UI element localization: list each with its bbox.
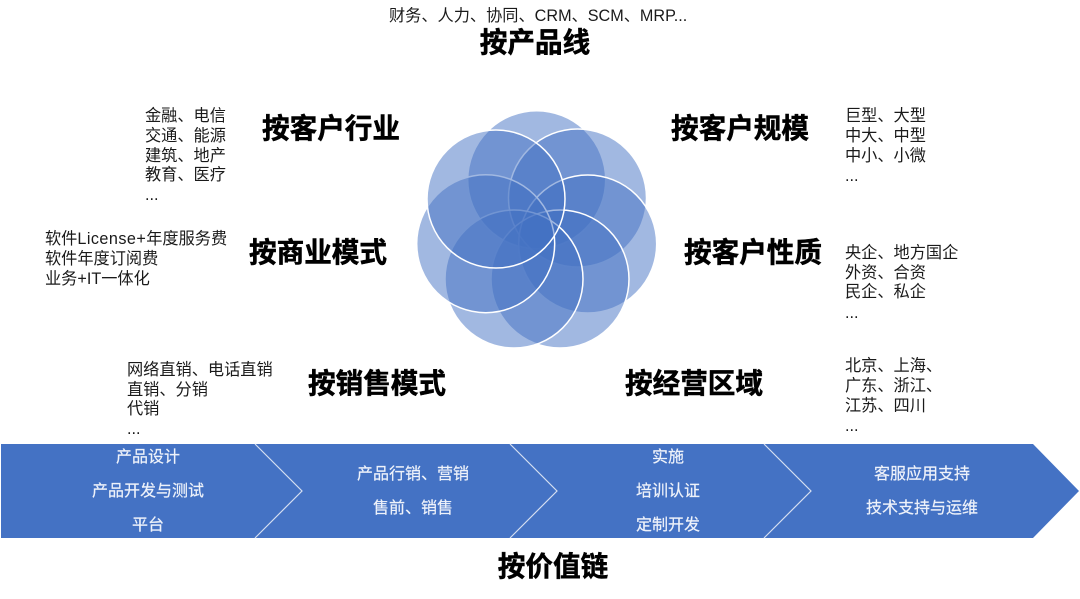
text block: sales stage: 售前、销售: [373, 499, 453, 517]
chart: value chain arrow band: [1, 444, 1079, 538]
text block: product line examples: 财务、人力、协同、CRM、SCM、MRP...: [389, 7, 687, 25]
text block: implementation stage: 实施: [652, 448, 684, 466]
circle: lower left: [445, 210, 583, 348]
circle: upper right: [508, 129, 646, 267]
circle: upper left: [427, 130, 565, 268]
text block: support stage: 技术支持与运维: [866, 499, 978, 517]
text block: implementation stage: 定制开发: [636, 516, 700, 534]
text block: sales models: 直销、分销: [127, 381, 208, 399]
text block: customer natures: 央企、地方国企: [845, 244, 958, 262]
heading: by customer nature: 按客户性质: [684, 237, 822, 268]
text block: customer natures: 外资、合资: [845, 264, 926, 282]
text block: sales models: [127, 360, 273, 438]
text block: industries: [145, 107, 226, 204]
text block: industries: ...: [145, 186, 158, 204]
text block: customer sizes: 中大、中型: [845, 127, 926, 145]
heading: by operating region: 按经营区域: [625, 368, 763, 399]
circle: left: [417, 175, 555, 313]
text block: sales models: 网络直销、电话直销: [127, 360, 273, 379]
text block: implementation stage: [636, 448, 700, 534]
text block: sales models: 代销: [127, 400, 159, 418]
circle: right: [519, 175, 657, 313]
heading: by sales model: 按销售模式: [308, 368, 446, 399]
circle: top: [468, 111, 606, 249]
divider: chevron 2: [510, 444, 557, 538]
text block: industries: 交通、能源: [145, 127, 226, 145]
text block: customer sizes: 中小、小微: [845, 147, 926, 165]
text block: customer sizes: 巨型、大型: [845, 107, 926, 125]
text block: product stage: 平台: [132, 516, 164, 534]
text block: regions: [845, 357, 942, 435]
text block: customer natures: ...: [845, 304, 858, 322]
text block: regions: 广东、浙江、: [845, 377, 942, 395]
text block: customer natures: 民企、私企: [845, 283, 926, 301]
text block: business models: [45, 230, 227, 288]
text block: business models: 业务+IT一体化: [45, 270, 150, 288]
text block: support stage: [866, 464, 978, 517]
text block: support stage: 客服应用支持: [874, 464, 970, 483]
heading: by customer industry: 按客户行业: [262, 113, 400, 144]
divider: chevron 1: [255, 444, 302, 538]
text block: industries: 教育、医疗: [145, 166, 226, 184]
text block: regions: 江苏、四川: [845, 397, 926, 415]
text block: regions: ...: [845, 417, 858, 435]
text block: customer sizes: ...: [845, 167, 858, 185]
text block: product stage: 产品设计: [116, 448, 180, 466]
text block: industries: 金融、电信: [145, 107, 226, 125]
text block: sales stage: [357, 465, 469, 517]
text block: product stage: 产品开发与测试: [92, 482, 204, 500]
heading: by customer size: 按客户规模: [671, 113, 809, 144]
text block: sales models: ...: [127, 420, 140, 438]
text block: sales stage: 产品行销、营销: [357, 465, 469, 483]
text block: customer natures: [845, 244, 958, 322]
text block: industries: 建筑、地产: [145, 147, 226, 165]
heading: by value chain: 按价值链: [498, 551, 609, 582]
chart: seven overlapping circles: [417, 111, 657, 348]
heading: by product line: 按产品线: [480, 27, 590, 58]
arrow: value chain background: [1, 444, 1079, 538]
text block: product stage: [92, 448, 204, 534]
circle: lower right: [491, 210, 629, 348]
divider: chevron 3: [764, 444, 811, 538]
heading: by business model: 按商业模式: [249, 237, 387, 268]
text block: business models: 软件License+年度服务费: [45, 230, 227, 248]
text block: business models: 软件年度订阅费: [45, 250, 158, 268]
text block: regions: 北京、上海、: [845, 357, 942, 375]
text block: customer sizes: [845, 107, 926, 185]
text block: implementation stage: 培训认证: [636, 482, 700, 500]
